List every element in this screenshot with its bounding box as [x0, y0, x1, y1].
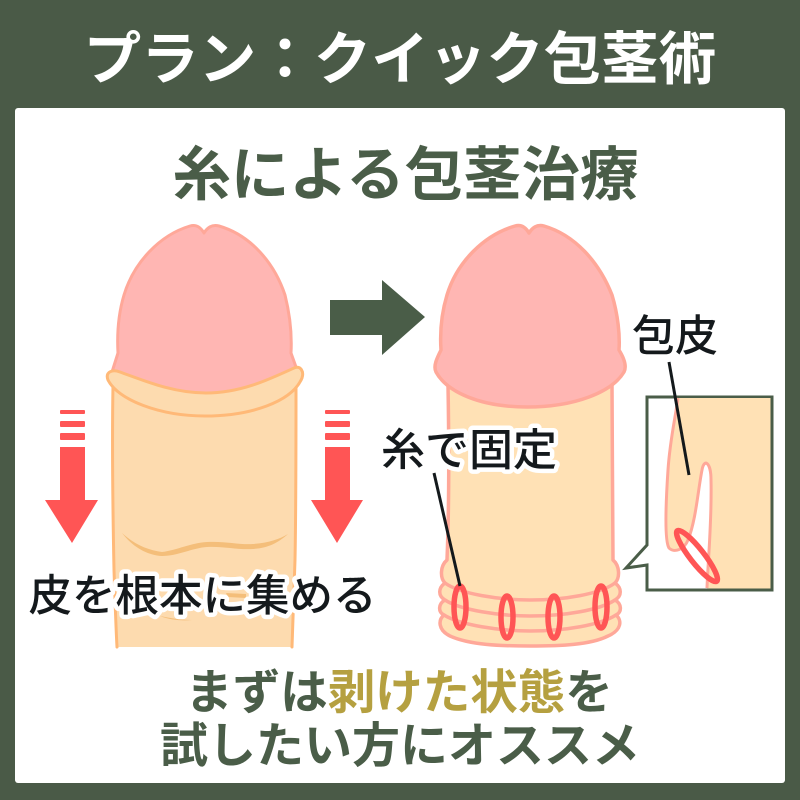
recommendation line 2: 試したい方にオススメ — [160, 720, 640, 773]
inset: cross section — [626, 397, 772, 590]
illustration: skin pulled down — [107, 225, 303, 647]
heading: 糸による包茎治療 — [172, 143, 639, 208]
label: foreskin: 包皮 — [632, 313, 718, 361]
arrow: down left — [45, 410, 98, 543]
title: プラン：クイック包茎術 — [84, 28, 716, 92]
illustration: after thread fixing — [435, 225, 625, 646]
arrow: down right — [311, 410, 363, 543]
label: fixed with thread: 糸で固定 — [381, 426, 557, 475]
recommendation line 1: まずは剥けた状態を — [185, 667, 613, 720]
label: gather skin: 皮を根本に集める — [28, 573, 376, 621]
arrow: process — [330, 280, 425, 355]
leader line: foreskin — [669, 362, 689, 475]
leader line: thread — [434, 473, 460, 586]
